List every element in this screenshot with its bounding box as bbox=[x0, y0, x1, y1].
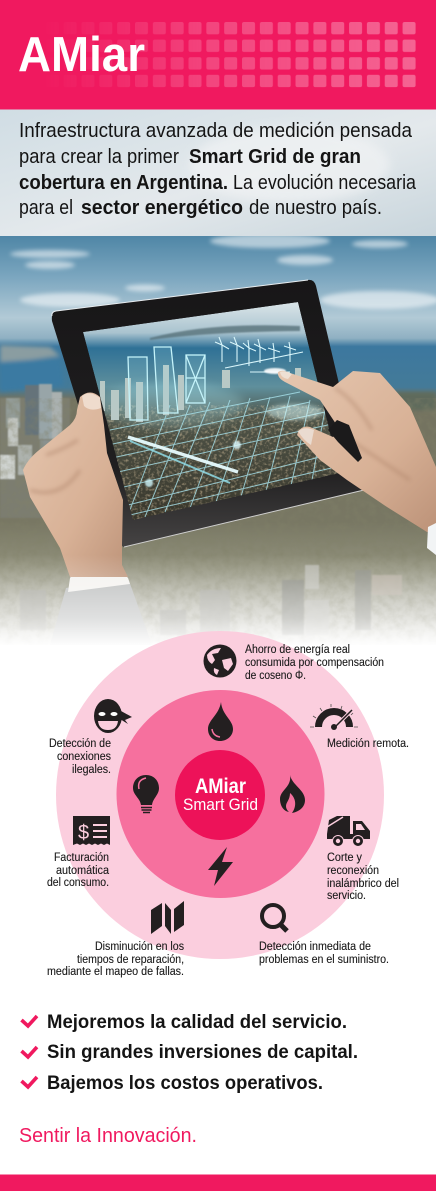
dot matrix pattern bbox=[82, 22, 416, 88]
intro text panel: para el bbox=[19, 196, 73, 219]
tablet edge between fingers bbox=[328, 420, 362, 462]
label: fault mapping: mediante el mapeo de fallas. bbox=[47, 964, 184, 978]
label: problem detection bbox=[259, 939, 389, 966]
label: illegal connections bbox=[49, 736, 111, 776]
label: illegal connections: conexiones bbox=[57, 749, 111, 763]
benefits checklist bbox=[22, 1011, 358, 1094]
label: wireless disconnect: Corte y bbox=[327, 850, 363, 864]
label: energy saving: consumida por compensación bbox=[245, 655, 384, 669]
icon: lightning bolt bbox=[208, 847, 233, 886]
title: AMiar bbox=[18, 28, 145, 82]
icon: magnifying glass bbox=[262, 905, 287, 931]
lower buildings bbox=[20, 565, 402, 635]
intro text panel bbox=[0, 110, 436, 236]
icon: water drop bbox=[208, 702, 233, 741]
city grid lines bbox=[108, 392, 340, 517]
icon: check bbox=[22, 1047, 37, 1057]
icon: globe bbox=[204, 644, 236, 678]
label: automatic billing: Facturación bbox=[54, 850, 109, 864]
outer ring bbox=[56, 631, 384, 959]
right hand bbox=[278, 371, 436, 532]
left sleeve and cuff bbox=[60, 577, 142, 628]
intro text panel: Smart Grid de gran bbox=[189, 145, 361, 168]
label: remote metering: Medición remota. bbox=[327, 736, 409, 750]
wind turbines bbox=[215, 337, 303, 372]
middle ring bbox=[116, 690, 324, 898]
circular diagram bbox=[47, 631, 409, 978]
icon: gauge bbox=[310, 704, 358, 730]
intro text panel: de nuestro país. bbox=[249, 196, 382, 219]
centre circle with title bbox=[175, 750, 265, 840]
label: problem detection: Detección inmediata de bbox=[259, 939, 371, 953]
benefits checklist: Mejoremos la calidad del servicio. bbox=[47, 1011, 347, 1033]
label: energy saving bbox=[245, 642, 384, 682]
icon: invoice: $ bbox=[78, 822, 89, 844]
left skyline bbox=[0, 384, 70, 518]
label: wireless disconnect: inalámbrico del bbox=[327, 876, 399, 890]
icon: check bbox=[22, 1077, 37, 1087]
tablet screen bbox=[80, 302, 350, 525]
benefits checklist: Sin grandes inversiones de capital. bbox=[47, 1041, 358, 1063]
label: illegal connections: ilegales. bbox=[72, 762, 111, 776]
distant sea and coast bbox=[0, 345, 436, 410]
clouds bbox=[10, 234, 436, 309]
icon: folded map bbox=[151, 901, 184, 934]
left hand bbox=[23, 392, 128, 577]
centre circle with title: Smart Grid bbox=[183, 796, 258, 814]
benefits checklist: Bajemos los costos operativos. bbox=[47, 1072, 323, 1094]
label: energy saving: de coseno Φ. bbox=[245, 668, 306, 682]
label: automatic billing bbox=[47, 850, 109, 889]
icon: truck bbox=[327, 816, 370, 846]
label: wireless disconnect: servicio. bbox=[327, 888, 366, 902]
header band bbox=[0, 0, 436, 110]
right shirt cuff bbox=[427, 523, 436, 555]
label: automatic billing: del consumo. bbox=[47, 875, 109, 889]
tagline: Sentir la Innovación. bbox=[19, 1124, 197, 1147]
city texture bbox=[0, 398, 436, 645]
label: wireless disconnect bbox=[327, 850, 399, 902]
photo: hands holding a tablet over a city bbox=[0, 234, 436, 645]
intro text panel: sector energético bbox=[81, 196, 243, 219]
icon: check bbox=[22, 1016, 37, 1026]
label: fault mapping bbox=[47, 939, 184, 978]
centre circle with title: AMiar bbox=[195, 775, 246, 798]
icon: light bulb bbox=[133, 775, 159, 812]
label: problem detection: problemas en el suministro. bbox=[259, 952, 389, 966]
intro text panel: cobertura en Argentina. bbox=[19, 171, 228, 194]
fade to white bbox=[0, 555, 436, 645]
footer bar bbox=[0, 1174, 436, 1191]
icon: invoice bbox=[73, 816, 110, 845]
label: wireless disconnect: reconexión bbox=[327, 863, 379, 877]
intro text panel: para crear la primer bbox=[19, 145, 179, 168]
label: energy saving: Ahorro de energía real bbox=[245, 642, 350, 656]
icon: flame bbox=[280, 775, 305, 813]
icon: masked thief bbox=[94, 699, 132, 733]
label: fault mapping: Disminución en los bbox=[95, 939, 184, 953]
tablet body bbox=[52, 280, 364, 547]
label: fault mapping: tiempos de reparación, bbox=[77, 952, 184, 966]
label: automatic billing: automática bbox=[56, 863, 109, 877]
skyline wireframes bbox=[128, 347, 205, 420]
intro text panel: Infraestructura avanzada de medición pensada bbox=[19, 119, 413, 142]
label: illegal connections: Detección de bbox=[49, 736, 111, 750]
skyline bbox=[100, 365, 301, 422]
